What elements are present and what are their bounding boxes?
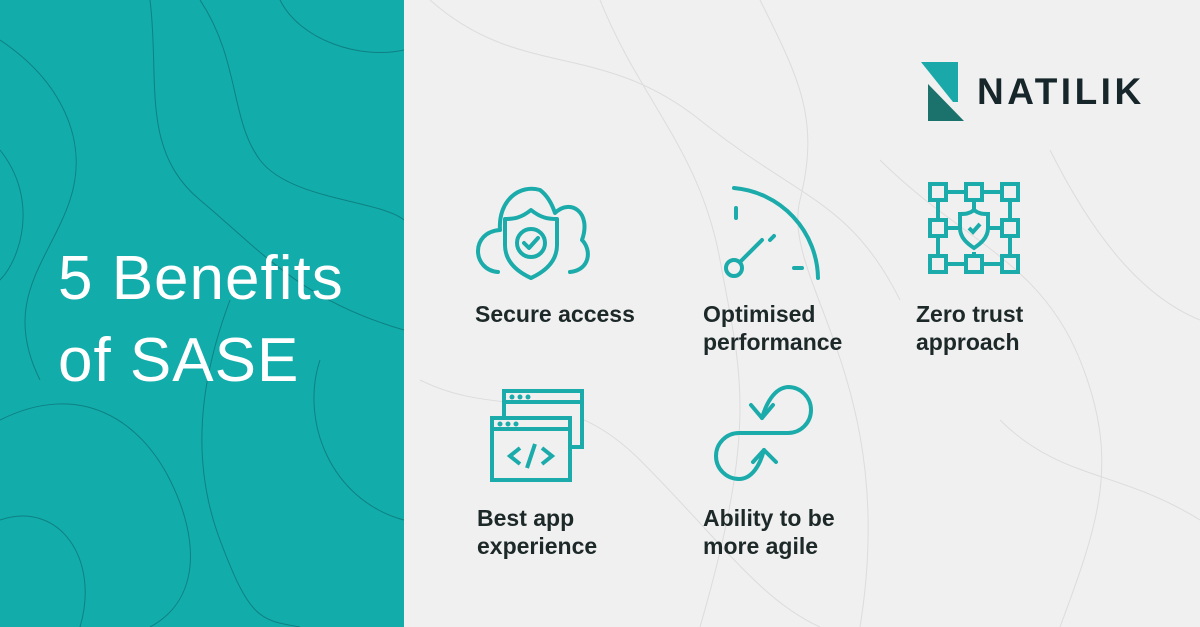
label: performance — [703, 329, 842, 355]
label — [916, 301, 1023, 355]
icon: zero trust grid — [928, 182, 1020, 274]
title: of SASE — [58, 326, 299, 395]
title — [58, 244, 344, 395]
label: Best app — [477, 505, 574, 531]
label: more agile — [703, 533, 818, 559]
label: Ability to be — [703, 505, 835, 531]
label — [703, 301, 842, 355]
icon: app windows — [490, 389, 584, 482]
logo — [921, 62, 1145, 121]
label: Zero trust — [916, 301, 1023, 327]
title: 5 Benefits — [58, 244, 344, 313]
panel: left teal — [0, 0, 404, 627]
label — [703, 505, 835, 559]
label: Secure access — [475, 301, 635, 327]
label: experience — [477, 533, 597, 559]
logo: NATILIK — [977, 71, 1145, 112]
label — [477, 505, 597, 559]
label: Optimised — [703, 301, 815, 327]
label: approach — [916, 329, 1020, 355]
icon: gauge — [724, 186, 820, 280]
